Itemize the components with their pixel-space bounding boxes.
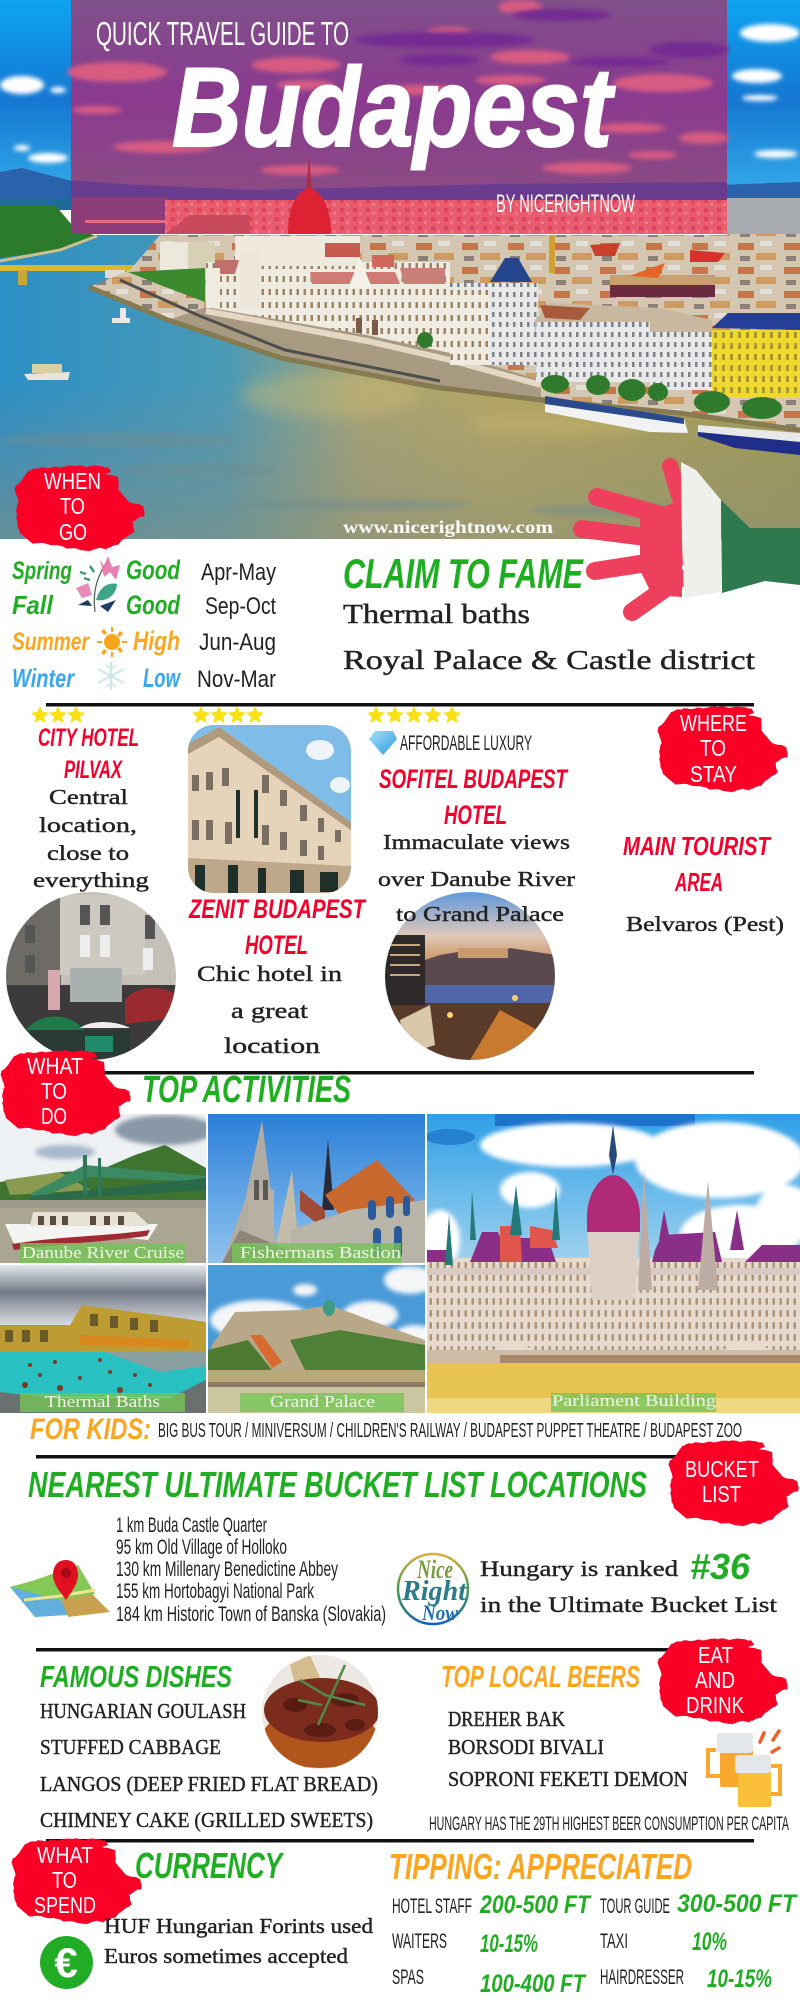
badge: bucket list [668,1440,798,1526]
badge: what to spend: SPEND [34,1892,96,1918]
hotel name [188,894,367,960]
tip: taxi [600,1928,727,1956]
stars [367,706,461,723]
photo: Danube river cruise [0,1114,215,1263]
hotel name: HOTEL [245,930,308,960]
badge: when to go [14,465,144,551]
description [197,961,342,1058]
tip: spas: SPAS [392,1966,424,1989]
panel: top local beers [429,1659,789,1835]
badge: what to spend [11,1838,141,1924]
fame item 1: Thermal baths [343,599,530,629]
right-hand buildings [450,235,800,398]
icon: euro coin: € [54,1939,78,1986]
tip: waiters [392,1930,538,1958]
tip: hairdresser: 10-15% [707,1965,772,1993]
stars [192,706,264,723]
dish list: STUFFED CABBAGE [40,1735,221,1759]
currency line 1: HUF Hungarian Forints used [104,1914,374,1938]
season: fall: Good [126,590,180,620]
hotel name: ZENIT BUDAPEST [188,894,367,924]
beer list: BORSODI BIVALI [448,1735,604,1759]
badge: eat and drink: DRINK [686,1692,745,1718]
small heading: quick travel guide: QUICK TRAVEL GUIDE TO [96,15,349,52]
photo: Fishermans Bastion [208,1114,425,1263]
season: spring [12,555,276,586]
hotel name: CITY HOTEL [38,724,139,752]
kids activities [30,1413,742,1446]
season: summer [12,626,276,656]
badge: eat and drink: EAT [698,1642,733,1668]
tip: spas: 100-400 FT [480,1970,587,1998]
bucket list distances [116,1514,386,1626]
description: location, [39,813,137,837]
website url: www.nicerightnow.com [343,517,553,537]
season: winter: Nov-Mar [197,666,276,693]
rank line 1: Hungary is ranked [480,1556,678,1581]
heading: CLAIM TO FAME [343,550,584,597]
icon: nice right now logo: Nice [416,1555,453,1584]
hero photo: Budapest parliament and Danube [0,0,800,539]
tip: hotel staff: HOTEL STAFF [392,1895,472,1918]
hotel photo [188,725,351,893]
tip: waiters: WAITERS [392,1930,447,1953]
panel: main tourist area [623,831,784,936]
photo: grand palace [208,1265,436,1413]
hotel name [379,764,569,830]
beer list: SOPRONI FEKETI DEMON [448,1767,688,1791]
season: fall: Fall [12,590,54,620]
heading: top activities: TOP ACTIVITIES [142,1069,351,1111]
badge: what to do: DO [41,1103,67,1129]
icon: nice right now logo [398,1554,468,1625]
badge: where to stay: TO [700,735,726,761]
panel: sofitel budapest hotel [367,706,575,1063]
description: Chic hotel in [197,961,342,986]
stars [31,706,85,723]
bucket list distances: 95 km Old Village of Holloko [116,1536,287,1559]
hotel name: HOTEL [444,800,507,830]
badge: when to go: WHEN [44,468,101,494]
icon: map pin [10,1560,110,1617]
beer list [448,1707,688,1791]
caption: Grand Palace [270,1392,375,1411]
affordable luxury label: AFFORDABLE LUXURY [400,732,532,755]
description: to Grand Palace [396,902,564,926]
badge: what to do [0,1050,130,1136]
description: a great [231,998,308,1023]
hotel name [38,724,139,784]
area name: Belvaros (Pest) [626,912,784,936]
caption: Danube River Cruise [22,1243,184,1262]
purple title overlay [67,0,729,234]
season: winter: Low [143,663,181,693]
badge: where to stay [657,706,787,792]
ships [24,308,800,455]
badge: eat and drink: AND [695,1667,735,1693]
tip: taxi: TAXI [600,1930,628,1953]
currency line 2: Euros sometimes accepted [104,1944,349,1968]
season: summer: Summer [12,628,90,656]
badge: what to do: TO [41,1078,67,1104]
byline: BY NICERIGHTNOW [496,190,635,218]
red dome [288,154,331,234]
heading: AREA [674,867,723,897]
caption: Thermal Baths [45,1392,160,1411]
season: summer: High [133,626,180,656]
fame item 2: Royal Palace & Castle district [343,645,756,675]
tip: hotel staff: 200-500 FT [479,1891,592,1919]
water [0,235,800,539]
badge: bucket list: LIST [702,1481,741,1507]
hotel name: SOFITEL BUDAPEST [379,764,569,794]
tip: hairdresser: HAIRDRESSER [600,1966,684,1989]
panel: famous dishes [40,1655,380,1832]
heading: FAMOUS DISHES [40,1659,232,1694]
panel: tipping [389,1846,798,1998]
caption [20,1392,185,1412]
photo: parliament building [420,1114,800,1413]
dish list: HUNGARIAN GOULASH [40,1699,246,1723]
ranking text [480,1546,777,1617]
description: close to [47,841,129,865]
embankment and trees [89,287,800,430]
dish photo [262,1655,380,1769]
caption: Fishermans Bastion [240,1243,402,1262]
heading: TIPPING: APPRECIATED [389,1846,692,1887]
description: Central [49,785,128,809]
tip: taxi: 10% [692,1928,727,1956]
icon: nice right now logo: Right [401,1576,467,1607]
icon: diamond [369,731,397,755]
badge: when to go: TO [60,493,85,519]
panel: currency [40,1845,374,1989]
bucket list distances: 184 km Historic Town of Banska (Slovakia) [116,1603,386,1626]
hotel name: PILVAX [64,756,123,784]
hotel photo [385,891,556,1063]
icon: snowflake [98,662,124,690]
heading: TOP LOCAL BEERS [441,1659,640,1694]
season: spring: Good [126,555,180,585]
bucket list distances: 155 km Hortobagyi National Park [116,1580,314,1603]
season: summer: Jun-Aug [199,629,276,656]
parliament [206,236,450,353]
rank line 2: in the Ultimate Bucket List [480,1592,777,1617]
dish list [40,1699,378,1832]
bucket list distances: 1 km Buda Castle Quarter [116,1514,267,1537]
description [378,830,575,926]
caption [240,1392,404,1412]
description [33,785,150,892]
season: spring: Apr-May [201,559,276,586]
badge: eat and drink [657,1638,787,1724]
badge: where to stay: WHERE [680,710,747,736]
badge: what to do: WHAT [27,1053,83,1079]
season: winter: Winter [12,663,75,693]
badge: where to stay: STAY [690,761,737,787]
dish list: CHIMNEY CAKE (GRILLED SWEETS) [40,1808,373,1832]
badge: bucket list: BUCKET [685,1456,759,1482]
island [0,205,95,258]
heading [623,831,772,897]
description: Immaculate views [383,830,570,854]
tip: waiters: 10-15% [480,1930,538,1958]
badge: when to go: GO [59,519,87,545]
panel: city hotel pilvax [6,706,176,1061]
dish list: LANGOS (DEEP FRIED FLAT BREAD) [40,1772,378,1796]
label: FOR KIDS: [30,1413,151,1446]
description: everything [33,868,150,892]
heading: CURRENCY [135,1845,284,1886]
icon: flower [76,556,120,612]
badge: what to spend: WHAT [37,1842,93,1868]
hotel photo [6,891,176,1061]
icon: sun [97,627,127,657]
title: Budapest: Budapest [172,45,616,170]
badge: what to spend: TO [52,1867,77,1893]
tip: tour guide [600,1890,798,1918]
bucket list distances: 130 km Millenary Benedictine Abbey [116,1558,338,1581]
rank number: #36 [690,1546,751,1587]
season: spring: Spring [12,557,72,585]
icon: beer mugs [708,1731,780,1807]
beer list: DREHER BAK [448,1707,565,1731]
season: fall: Sep-Oct [205,593,276,620]
yellow bridge [0,265,150,285]
tip: spas [392,1966,587,1998]
panel: seasons [12,555,276,693]
panel: zenit budapest hotel [188,706,367,1058]
season: winter [12,663,276,693]
panel: claim to fame [343,550,756,675]
caption: Parliament Building [552,1391,717,1410]
tip: tour guide: TOUR GUIDE [600,1895,670,1918]
season: fall [12,590,276,620]
description: location [224,1033,320,1058]
photo: thermal baths [0,1265,206,1413]
tip: hotel staff [392,1891,592,1919]
description: over Danube River [378,867,575,891]
icon: euro coin [40,1936,93,1989]
icon: nice right now logo: Now [421,1600,458,1625]
city land [89,205,800,430]
icon: flag-painted hand [582,462,800,612]
